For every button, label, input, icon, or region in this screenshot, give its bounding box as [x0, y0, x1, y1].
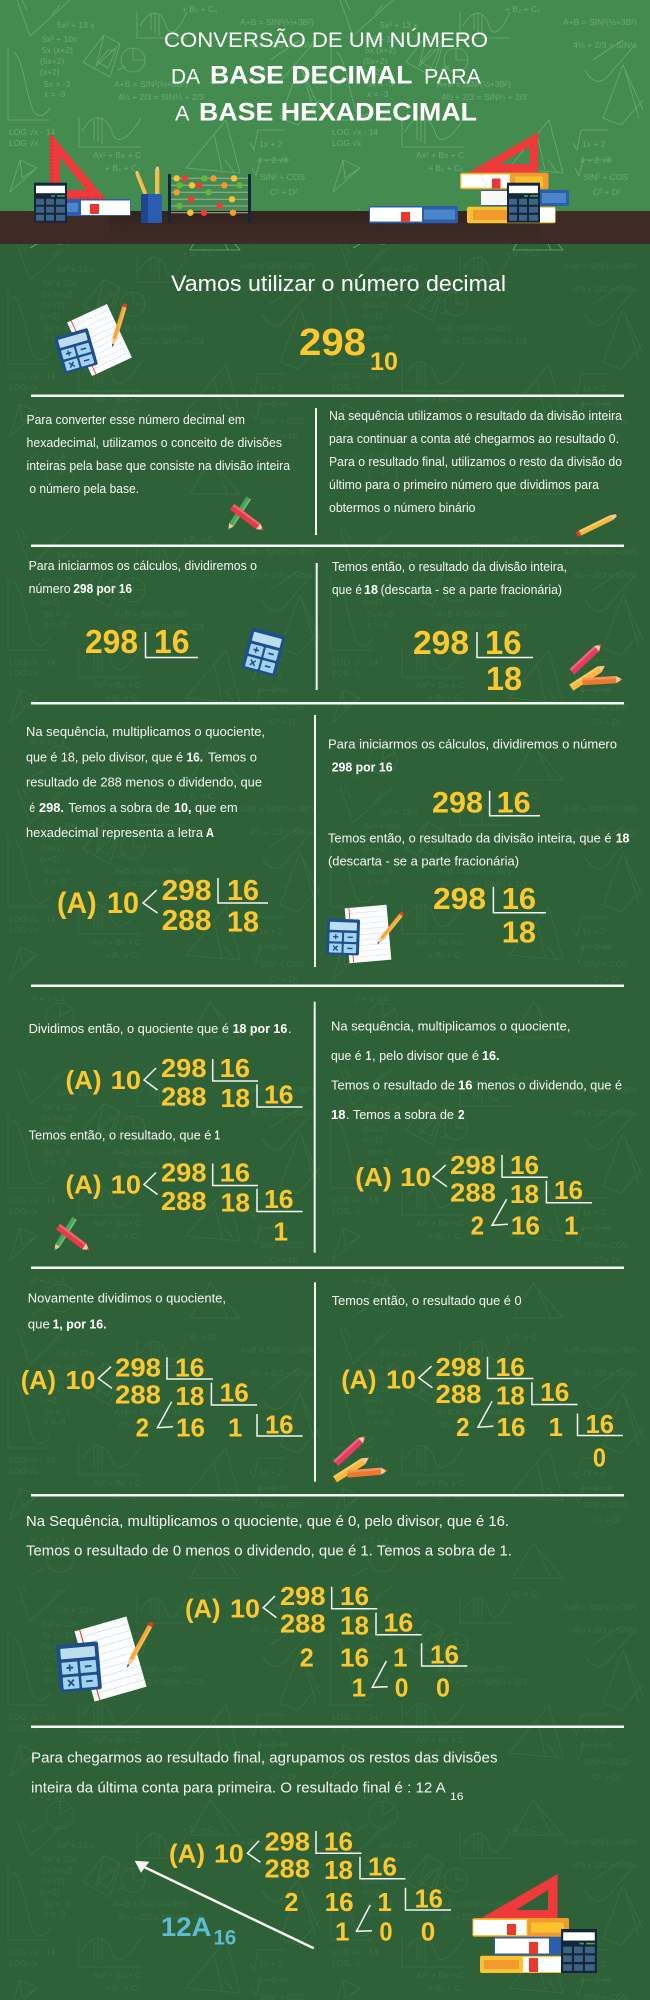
equation: remainder 2: 10: [400, 1162, 431, 1192]
icon: three pencils: [333, 1434, 388, 1482]
equation: 298 / 16: 298: [85, 623, 138, 660]
equation: 298 / 16 = 18: [413, 624, 533, 697]
equation: result 0: [341, 1352, 623, 1473]
equation: remainder 1: 1: [352, 1673, 366, 1703]
panel: integer result: [332, 559, 623, 697]
equation: 298 / 16: 298: [432, 787, 483, 820]
panel: recap of division: [326, 737, 629, 963]
equation: remainder 1: 288: [280, 1609, 326, 1639]
equation: remainder A: 16: [227, 875, 259, 907]
equation: 298 / 16 = 18: 18: [486, 660, 522, 697]
panel: last multiplication: Temos o resultado de 0 menos o dividendo, que é 1. Temos a sobra de 1.: [26, 1544, 512, 1560]
equation: complete: [169, 1827, 451, 1947]
equation: remainder 1: 18: [340, 1610, 369, 1640]
equation: remainder 1: 0: [395, 1673, 408, 1703]
equation: result 0: 16: [496, 1352, 525, 1382]
equation: 298 / 16 = 18: 298: [413, 624, 469, 661]
equation: remainder A: 18: [227, 906, 259, 938]
panel: last multiplication: [26, 1514, 512, 1703]
panel: multiply second quotient: Temos o resultado de: [331, 1077, 455, 1092]
panel: explanation left: hexadecimal, utilizamos o conceito de divisões: [26, 435, 282, 450]
equation: remainder 2: 16: [511, 1210, 540, 1240]
equation: result 0: 0: [593, 1443, 606, 1473]
equation: result 1: 18: [220, 1188, 250, 1218]
icon: paper and calculator: [54, 303, 132, 376]
icon: pencil cup: [134, 164, 162, 223]
equation: remainder 1: (A): [185, 1594, 221, 1624]
panel: last multiplication: Na Sequência, multiplicamos o quociente, que é 0, pelo divisor, que é 16.: [26, 1514, 509, 1530]
title: PARA: [424, 66, 481, 88]
number: 298 base 10: 298: [299, 322, 366, 364]
heading: vamos utilizar: Vamos utilizar o número decimal: [171, 271, 506, 296]
panel: multiply quotient: A: [206, 825, 215, 840]
title: CONVERSÃO DE UM NÚMERO: [164, 28, 488, 52]
panel: first division: 298 por 16: [73, 581, 132, 596]
panel: final result: [31, 1751, 597, 1973]
panel: multiply quotient: é: [29, 800, 35, 815]
equation: result 1: 288: [161, 1186, 206, 1216]
equation: 298 / 16 = 18: 16: [485, 624, 522, 661]
equation: remainder 2: 18: [510, 1179, 539, 1209]
panel: recap of division: Temos então, o resultado da divisão inteira, que é: [328, 831, 612, 846]
desk: [0, 211, 650, 244]
equation: remainder 2: 2: [471, 1210, 484, 1240]
panel: multiply quotient: que em: [195, 800, 238, 815]
equation: result 1: 16: [264, 1184, 294, 1214]
panel: integer result: que é: [332, 582, 362, 597]
icon: right desk book: [369, 206, 458, 223]
equation: remainder 1: 0: [436, 1673, 450, 1703]
panel: multiply quotient: 16.: [186, 749, 203, 764]
equation: remainder A: (A): [57, 887, 97, 920]
equation: complete: 18: [324, 1855, 353, 1885]
panel: result zero: [332, 1293, 623, 1482]
equation: complete: 1: [335, 1917, 349, 1947]
equation: complete: 16: [325, 1887, 354, 1917]
equation: result 0: 298: [436, 1352, 482, 1382]
title: [164, 28, 488, 126]
icon: yellow pencil: [576, 511, 621, 537]
number: 298 base 10: [299, 322, 398, 376]
panel: explanation left: Para converter esse número decimal em: [26, 412, 245, 427]
equation: complete: 0: [421, 1917, 435, 1947]
equation: remainder A: 288: [162, 905, 212, 937]
equation: remainder 2: 16: [510, 1150, 539, 1180]
equation: result 1: [66, 1158, 303, 1247]
panel: third division: [21, 1290, 303, 1443]
equation: remainder A: 10: [107, 887, 139, 920]
panel: final result: inteira da última conta para primeira. O resultado final é : 12 A: [31, 1780, 446, 1796]
panel: explanation left: o número pela base.: [29, 481, 139, 496]
panel: explanation right: para continuar a conta até chegarmos ao resultado 0.: [329, 431, 619, 446]
title: BASE DECIMAL: [210, 62, 412, 90]
equation: remainder 1: 16: [340, 1581, 369, 1611]
panel: result zero: Temos então, o resultado que é 0: [332, 1293, 522, 1308]
equation: 1 by 16: 10: [66, 1365, 95, 1395]
equation: result 0: 18: [496, 1380, 525, 1410]
panel: first division: [29, 558, 286, 677]
panel: recap of division: 298 por 16: [332, 760, 393, 775]
equation: remainder 2: 16: [554, 1175, 583, 1205]
panel: multiply quotient: 10,: [174, 800, 192, 815]
panel: second division: [29, 1021, 303, 1253]
equation: 18 by 16: [66, 1053, 303, 1113]
equation: result 0: 16: [540, 1377, 569, 1407]
equation: complete: 16: [368, 1852, 397, 1882]
panel: recap of division: (descarta - se a parte fracionária): [328, 854, 519, 869]
icon: crossed pencils: [52, 1217, 91, 1253]
equation: result 0: (A): [341, 1364, 376, 1394]
panel: multiply second quotient: Na sequência, multiplicamos o quociente,: [331, 1018, 570, 1033]
equation: 18 by 16: 18: [220, 1083, 250, 1113]
panel: multiply second quotient: 16.: [482, 1048, 500, 1063]
equation: complete: 298: [264, 1827, 310, 1857]
panel: third division: Novamente dividimos o quociente,: [28, 1290, 226, 1305]
panel: second division: Dividimos então, o quociente que é: [29, 1021, 229, 1036]
panel: third division: 1, por 16.: [53, 1317, 106, 1332]
equation: complete: 16: [415, 1884, 443, 1914]
equation: 298 / 16: [432, 787, 540, 820]
arrow: reading direction: [135, 1861, 314, 1948]
equation: complete: 1: [377, 1887, 392, 1917]
icon: paper and calculator: [56, 1616, 154, 1702]
equation: remainder 1: 16: [430, 1639, 459, 1669]
equation: remainder 2: 288: [450, 1178, 496, 1208]
panel: explanation left: [26, 412, 291, 533]
equation: remainder 1: 2: [300, 1643, 314, 1673]
equation: complete: 16: [324, 1827, 353, 1857]
equation: complete: (A): [169, 1838, 205, 1868]
equation: result 0: 16: [496, 1412, 526, 1442]
equation: result 1: (A): [66, 1170, 102, 1200]
panel: first division: Para iniciarmos os cálculos, dividiremos o: [29, 558, 257, 573]
equation: 1 by 16: 288: [115, 1379, 161, 1409]
panel: integer result: (descarta - se a parte fracionária): [381, 582, 562, 597]
panel: multiply second quotient: 16: [458, 1077, 472, 1092]
equation: 18 by 16: 16: [220, 1053, 250, 1083]
panel: recap of division: Para iniciarmos os cálculos, dividiremos o número: [328, 737, 617, 752]
equation: remainder 1: 10: [230, 1594, 260, 1624]
equation: result 0: 16: [586, 1409, 614, 1439]
equation: result 1: 298: [161, 1158, 206, 1188]
equation: 298 / 16: 16: [497, 787, 531, 820]
equation: complete: 10: [214, 1838, 244, 1868]
icon: books, ruler and calculator: [473, 1874, 597, 1973]
panel: integer result: 18: [364, 582, 378, 597]
icon: abacus: [168, 174, 251, 223]
equation: result 0: 10: [386, 1364, 416, 1394]
equation: 298 / 16 = 18: 16: [502, 881, 536, 916]
equation: 1 by 16: 18: [175, 1381, 204, 1411]
icon: crossed pencils: [226, 497, 265, 533]
result: 12A base 16: 16: [214, 1926, 236, 1949]
equation: 298 / 16: [85, 623, 198, 660]
equation: 1 by 16: 2: [136, 1413, 149, 1443]
number: 298 base 10: 10: [370, 348, 398, 376]
equation: remainder 1: 16: [340, 1643, 369, 1673]
panel: multiply quotient: Na sequência, multiplicamos o quociente,: [26, 724, 265, 739]
panel: final result: 16: [450, 1791, 464, 1803]
icon: paper and calculator: [326, 905, 405, 963]
panel: explanation right: último para o primeiro número que dividimos para: [329, 477, 600, 492]
equation: 1 by 16: 16: [176, 1413, 205, 1443]
panel: final result: Para chegarmos ao resultado final, agrupamos os restos das divisões: [31, 1751, 498, 1767]
equation: 1 by 16: (A): [21, 1365, 56, 1395]
panel: multiply quotient: 298.: [39, 800, 64, 815]
panel: multiply second quotient: que é: [331, 1048, 362, 1063]
equation: 18 by 16: 298: [161, 1053, 206, 1083]
equation: 18 by 16: 10: [111, 1065, 141, 1095]
title: A: [175, 102, 190, 126]
panel: second division: 18 por 16: [233, 1021, 287, 1036]
panel: second division: Temos então, o resultado, que é: [29, 1128, 211, 1143]
equation: remainder 1: 16: [384, 1608, 413, 1638]
equation: 1 by 16: 1: [228, 1413, 242, 1443]
panel: multiply quotient: Temos o: [208, 749, 257, 764]
panel: explanation left: inteiras pela base que consiste na divisão inteira: [26, 458, 291, 473]
panel: explanation right: obtermos o número binário: [329, 500, 476, 515]
icon: calculator: [241, 627, 286, 677]
title: BASE HEXADECIMAL: [199, 98, 477, 126]
equation: 298 / 16 = 18: 18: [502, 915, 536, 950]
equation: 298 / 16 = 18: [433, 881, 546, 950]
equation: remainder 1: 1: [393, 1643, 407, 1673]
panel: third division: que: [28, 1317, 50, 1332]
equation: complete: 0: [379, 1917, 393, 1947]
equation: result 1: 1: [274, 1217, 288, 1247]
panel: first division: número: [29, 581, 71, 596]
panel: multiply second quotient: 2: [458, 1107, 464, 1122]
panel: explanation right: Na sequência utilizamos o resultado da divisão inteira: [329, 408, 623, 423]
equation: 1 by 16: 16: [220, 1378, 249, 1408]
panel: multiply quotient: que é 18, pelo divisor, que é: [26, 749, 183, 764]
equation: 1 by 16: 298: [115, 1353, 161, 1383]
icon: left desk objects: [34, 133, 131, 223]
equation: remainder 2: [355, 1150, 592, 1240]
equation: remainder 1: 298: [280, 1581, 326, 1611]
equation: remainder 2: 1: [564, 1210, 578, 1240]
equation: remainder 2: (A): [355, 1162, 392, 1192]
panel: multiply quotient: [26, 724, 268, 938]
panel: multiply second quotient: , pelo divisor que é: [372, 1048, 479, 1063]
icon: three pencils: [569, 642, 623, 691]
panel: second division: .: [288, 1021, 292, 1036]
equation: 298 / 16: 16: [154, 623, 190, 660]
panel: multiply second quotient: . Temos a sobra de: [346, 1107, 454, 1122]
equation: 18 by 16: 288: [161, 1082, 206, 1112]
result: 12A base 16: 12A: [161, 1912, 211, 1942]
equation: remainder A: [57, 875, 268, 938]
panel: multiply second quotient: 18: [331, 1107, 346, 1122]
panel: explanation right: [329, 408, 623, 537]
equation: result 0: 2: [456, 1412, 470, 1442]
panel: multiply quotient: hexadecimal representa a letra: [26, 825, 204, 840]
equation: result 1: 10: [111, 1170, 141, 1200]
panel: multiply second quotient: 1: [366, 1048, 371, 1063]
icon: right desk book stack: [460, 132, 569, 223]
equation: remainder A: 298: [162, 875, 212, 907]
equation: result 0: 288: [436, 1379, 482, 1409]
panel: multiply quotient: resultado de 288 menos o dividendo, que: [26, 775, 262, 790]
equation: result 0: 1: [548, 1412, 563, 1442]
equation: 18 by 16: 16: [264, 1080, 294, 1110]
equation: result 1: 16: [220, 1158, 250, 1188]
equation: 18 by 16: (A): [66, 1065, 102, 1095]
panel: explanation right: Para o resultado final, utilizamos o resto da divisão do: [329, 454, 622, 469]
title: DA: [171, 66, 200, 88]
equation: complete: 288: [264, 1854, 310, 1884]
equation: remainder 2: 298: [450, 1150, 496, 1180]
equation: complete: 2: [284, 1887, 298, 1917]
equation: remainder 1: [185, 1581, 467, 1703]
equation: 1 by 16: [21, 1352, 303, 1443]
equation: 1 by 16: 16: [175, 1352, 204, 1382]
panel: recap of division: 18: [616, 831, 629, 846]
equation: 1 by 16: 16: [265, 1409, 294, 1439]
result: 12A base 16: [161, 1912, 236, 1949]
panel: multiply quotient: Temos a sobra de: [68, 800, 170, 815]
equation: 298 / 16 = 18: 298: [433, 881, 486, 916]
panel: integer result: Temos então, o resultado da divisão inteira,: [332, 559, 567, 574]
panel: second division: 1: [215, 1128, 220, 1143]
panel: multiply second quotient: [331, 1018, 622, 1240]
panel: multiply second quotient: menos o dividendo, que é: [477, 1077, 622, 1092]
